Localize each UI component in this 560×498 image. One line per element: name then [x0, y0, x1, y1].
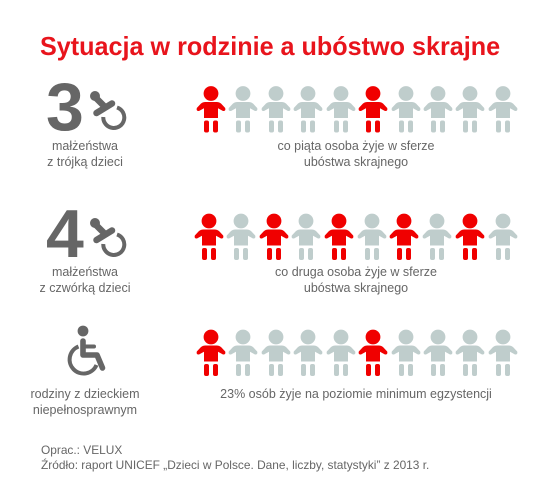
caption row 2: ubóstwa skrajnego [304, 281, 408, 295]
number 3 with pacifier icon: 3 [46, 69, 84, 145]
label: three children: z trójką dzieci [47, 155, 123, 169]
label: four children: małżeństwa [52, 265, 118, 279]
label: four children [40, 265, 130, 295]
source note: Źródło: raport UNICEF „Dzieci w Polsce. Dane, liczby, statystyki” z 2013 r. [41, 458, 429, 472]
label: three children [47, 139, 123, 169]
label: three children: małżeństwa [52, 139, 118, 153]
label: disabled child [30, 387, 140, 417]
label: disabled child: niepełnosprawnym [33, 403, 137, 417]
caption row 3: 23% osób żyje na poziomie minimum egzystencji [220, 387, 492, 401]
caption row 1: co piąta osoba żyje w sferze [277, 139, 435, 153]
label: disabled child: rodziny z dzieckiem [30, 387, 140, 401]
source note: Oprac.: VELUX [41, 443, 122, 457]
number 3 with pacifier icon [46, 69, 124, 145]
icon: wheelchair [70, 326, 102, 374]
number 4 with pacifier icon: 4 [46, 196, 84, 272]
pictogram row 2: one in two [195, 214, 517, 260]
number 4 with pacifier icon [46, 196, 124, 272]
pictogram row 1: one in five [197, 86, 517, 132]
pictogram row 3: 23 percent [197, 330, 517, 376]
title: Sytuacja w rodzinie a ubóstwo skrajne [40, 31, 500, 61]
label: four children: z czwórką dzieci [40, 281, 130, 295]
caption row 2: co druga osoba żyje w sferze [275, 265, 437, 279]
caption row 2 [275, 265, 437, 295]
caption row 1: ubóstwa skrajnego [304, 155, 408, 169]
caption row 1 [277, 139, 435, 169]
source note [41, 443, 429, 472]
